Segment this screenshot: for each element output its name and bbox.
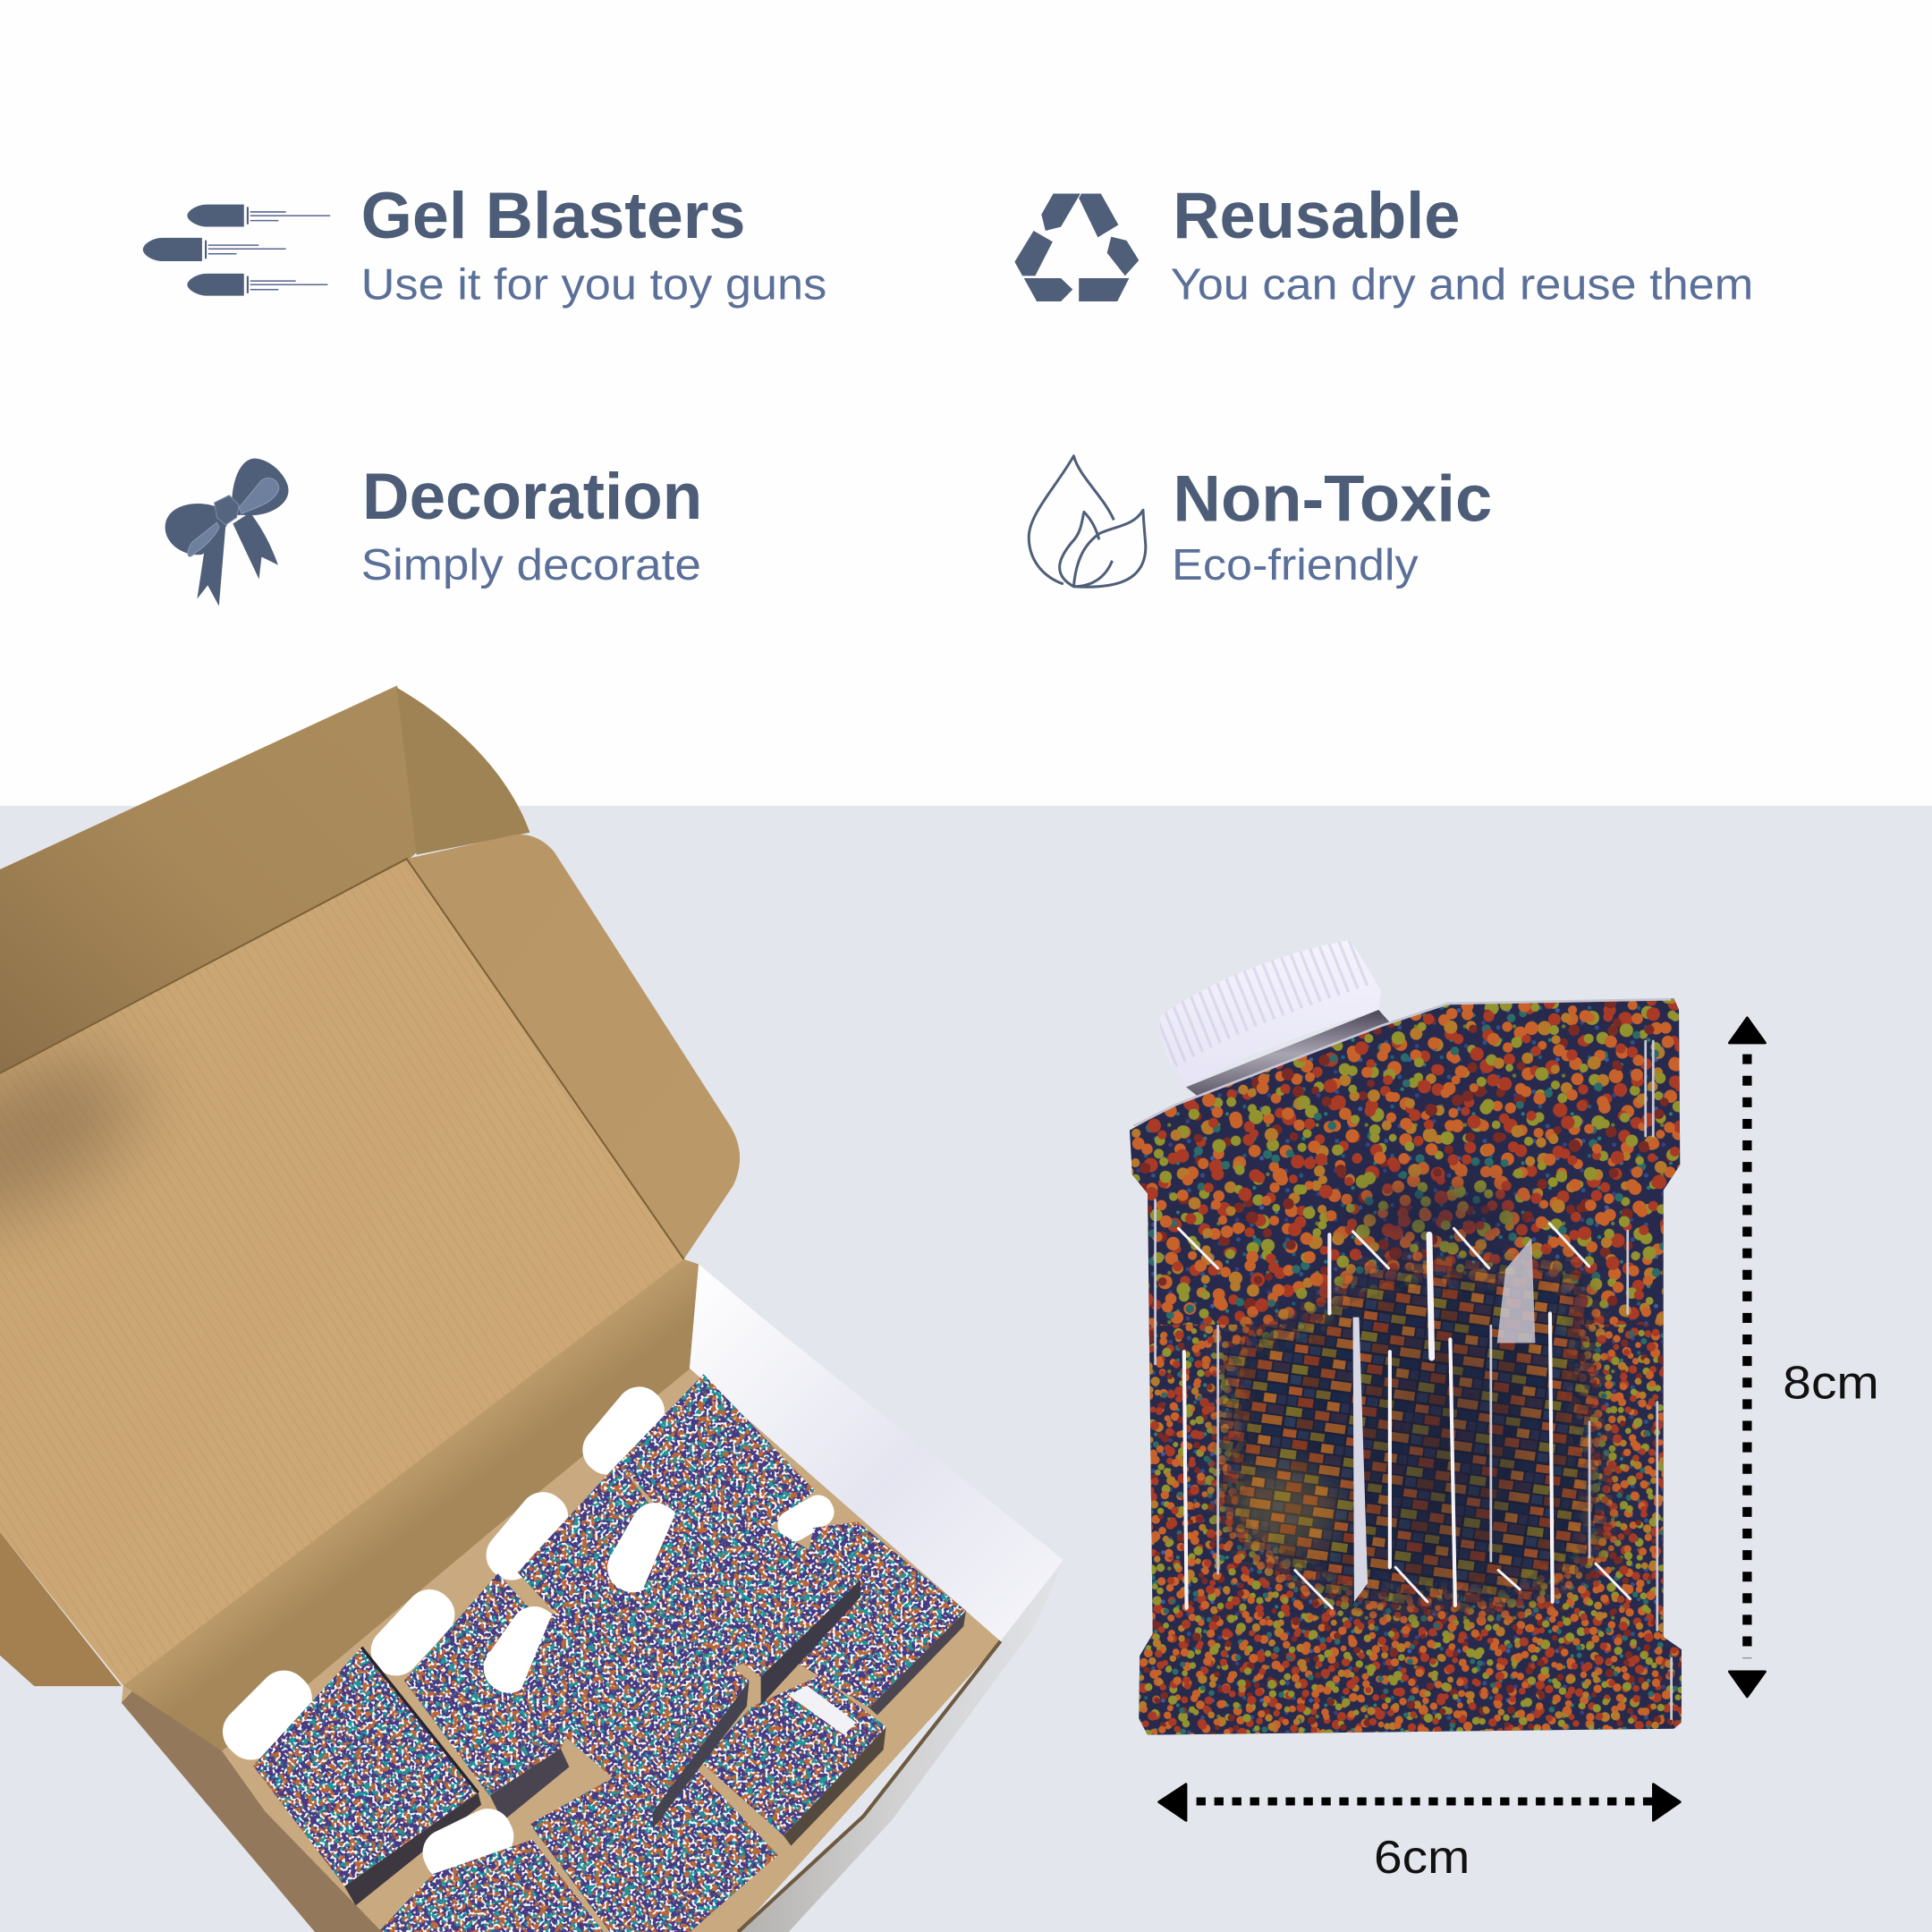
bottle neck — [1186, 1010, 1393, 1099]
icon: bow — [165, 458, 289, 606]
bottle front left — [213, 1648, 481, 1905]
bottle right — [772, 1489, 966, 1716]
panel: grey lower band — [0, 806, 1932, 1932]
silver outer edge — [738, 1563, 1063, 1932]
feature: non-toxic — [1029, 456, 1492, 589]
bottle body filled with gel beads — [1122, 992, 1688, 1743]
heading: decoration: Decoration — [362, 461, 702, 533]
bottle back right — [573, 1374, 815, 1553]
bottle centre front — [474, 1597, 750, 1828]
label: 6cm: 6cm — [1374, 1832, 1470, 1884]
left flap — [0, 1532, 122, 1686]
feature: reusable — [1014, 180, 1753, 309]
bottle cap — [1160, 940, 1381, 1087]
icon: bullets — [143, 205, 330, 296]
box floor — [122, 1355, 1001, 1932]
heading: gel blasters: Gel Blasters — [361, 180, 745, 252]
box lid interior — [0, 860, 699, 1751]
bottle back middle — [477, 1462, 764, 1688]
left rim — [122, 1690, 382, 1932]
bottle centre brick texture — [1204, 1245, 1623, 1626]
icon: drop and leaf — [1029, 456, 1146, 587]
fold lines — [0, 859, 684, 1259]
text: non-toxic description: Eco-friendly — [1172, 541, 1419, 589]
photo: large bottle — [1129, 941, 1682, 1735]
arrow: width dimension — [1159, 1784, 1680, 1820]
white liner — [690, 1264, 1063, 1641]
cardboard edge — [738, 1641, 1001, 1932]
bottle shoulder highlight — [1133, 999, 1671, 1126]
box corner flap — [397, 688, 530, 855]
heading: reusable: Reusable — [1173, 180, 1460, 252]
bottle middle left — [361, 1573, 591, 1821]
lid shadow — [0, 1029, 156, 1245]
back wall — [123, 1259, 699, 1751]
bottle lower right — [701, 1675, 886, 1846]
photo: open cardboard box with bottles — [0, 685, 1063, 1932]
arrow: height dimension — [1729, 1018, 1765, 1697]
text: decoration description: Simply decorate — [361, 541, 701, 589]
feature: gel blasters — [143, 180, 826, 309]
heading: non-toxic: Non-Toxic — [1173, 463, 1492, 536]
label: 8cm: 8cm — [1783, 1358, 1879, 1410]
text: reusable description: You can dry and reuse them — [1171, 261, 1753, 309]
feature: decoration — [165, 458, 702, 606]
icon: recycle — [1014, 194, 1139, 301]
bottle highlights — [1156, 1041, 1672, 1719]
text: gel blasters description: Use it for you toy guns — [361, 261, 826, 309]
bottle bottom centre — [530, 1762, 778, 1932]
box back flap — [0, 685, 417, 1074]
bottle upper centre — [598, 1494, 860, 1706]
box right flap — [407, 835, 740, 1259]
bottle bottom left — [378, 1801, 604, 1932]
